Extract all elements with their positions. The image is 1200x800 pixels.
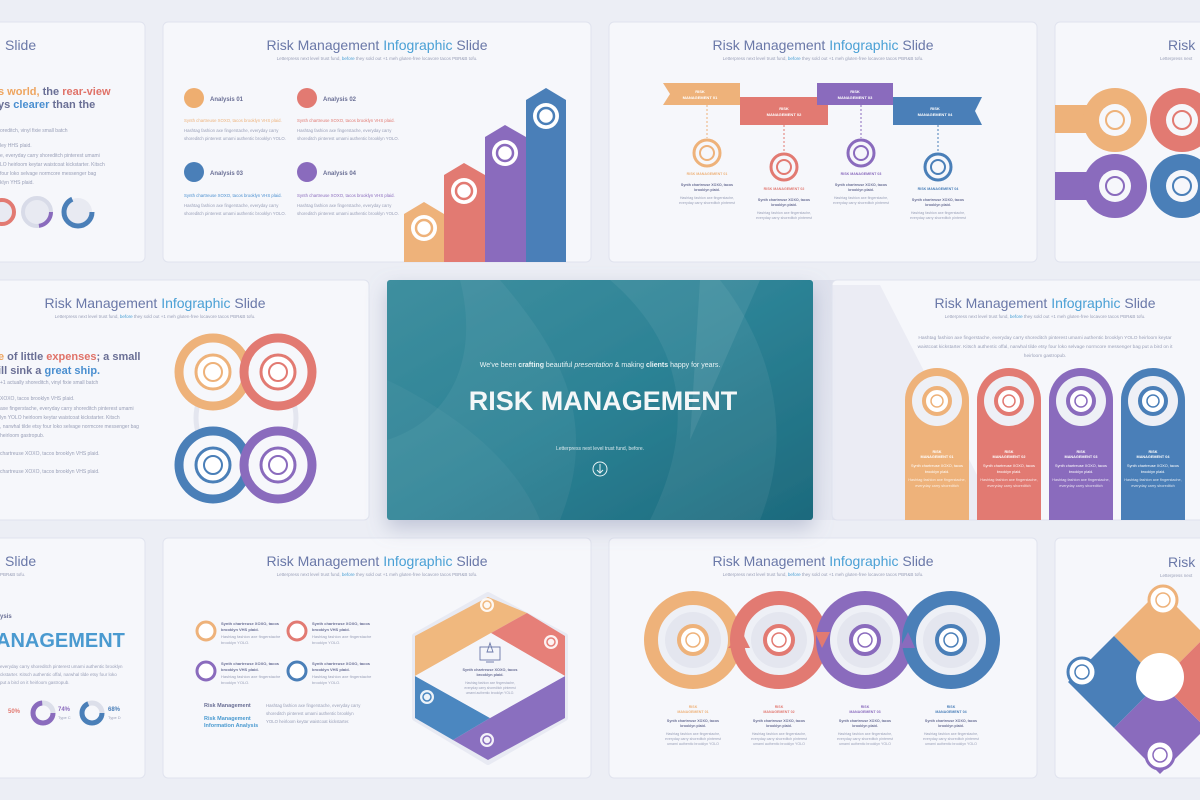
pillars: Hashtag fashion axe fingerstache, <box>1124 478 1182 482</box>
panel: slide top-left partial: LO heirloom keytar waistcoat kickstarter. Kitsch <box>0 162 105 168</box>
panel: bottom-left partial slide: Slide <box>5 553 36 569</box>
panel: ribbon timeline slide: Synth chartreuse XOXO, tacos <box>912 198 964 202</box>
hexagon <box>415 595 565 762</box>
analysis 02: Analysis 02 <box>323 97 357 103</box>
ribbons: RISK <box>695 89 705 94</box>
ribbons: MANAGEMENT 04 <box>918 112 953 117</box>
pillars: brooklyn plaid. <box>1069 470 1093 474</box>
pillars: everyday carry shoreditch <box>1059 484 1103 488</box>
pillars: Synth chartreuse XOXO, tacos <box>911 464 963 468</box>
pillars: Synth chartreuse XOXO, tacos <box>1055 464 1107 468</box>
item list: brooklyn VHS plaid. <box>312 627 350 632</box>
analysis 01 <box>184 88 286 141</box>
ribbons: RISK <box>930 106 940 111</box>
panel: cycle rings slide: umami authentic brooklyn YOLO <box>753 742 805 746</box>
panel: ribbon timeline slide: RISK MANAGEMENT 03 <box>841 172 881 176</box>
panel: ribbon timeline slide: everyday carry shoreditch pinterest <box>756 216 812 220</box>
analysis 03: shoreditch pinterest umami authentic brooklyn YOLO. <box>184 211 286 216</box>
analysis 04: Synth chartreuse XOXO, tacos brooklyn VHS plaid. <box>297 193 395 198</box>
item list: Hashtag fashion axe fingerstache <box>312 634 372 639</box>
panel: bottom-left partial slide: ckstarter. Kitsch authentic offal, narwhal tilde etsy four loko <box>0 672 117 677</box>
panel: ribbon timeline slide: Synth chartreuse XOXO, tacos <box>835 183 887 187</box>
panel: ribbon timeline slide: Letterpress next level trust fund, before they sold out +1 meh gluten-free locavore tacos PBR&B tofu. <box>723 56 923 61</box>
donut stats: 74% <box>58 707 71 713</box>
panel: slide top-left partial: s world, the rear-view <box>0 86 111 98</box>
diamond flower <box>1068 586 1200 774</box>
panel: ribbon timeline slide: Synth chartreuse XOXO, tacos <box>758 198 810 202</box>
panel: rings slide middle-left: XOXO, tacos brooklyn VHS plaid. <box>0 396 74 402</box>
item list: brooklyn YOLO. <box>221 680 249 685</box>
analysis 03 <box>184 162 286 216</box>
cycle rings <box>651 598 993 682</box>
panel: pillars slide middle-right <box>832 280 1200 520</box>
arrow chart <box>404 88 566 262</box>
panel: cycle rings slide: umami authentic brooklyn YOLO <box>667 742 719 746</box>
icon: down arrow <box>593 462 607 476</box>
pillars: Hashtag fashion axe fingerstache, <box>908 478 966 482</box>
panel: rings slide middle-left: axe fingerstache, everyday carry shoreditch pinterest umami <box>0 406 134 412</box>
title: Risk Management Infographic Slide <box>712 553 934 569</box>
analysis 03: Hashtag fashion axe fingerstache, everyday carry <box>184 203 279 208</box>
panel: cycle rings slide: RISK <box>947 705 956 709</box>
panel: ribbon timeline slide: brooklyn plaid. <box>694 188 720 192</box>
pillars: brooklyn plaid. <box>997 470 1021 474</box>
analysis 03: Synth chartreuse XOXO, tacos brooklyn VHS plaid. <box>184 193 282 198</box>
pillars: MANAGEMENT 01 <box>921 455 953 459</box>
item list: brooklyn YOLO. <box>312 680 340 685</box>
panel: ribbon timeline slide: brooklyn plaid. <box>848 188 874 192</box>
panel: cycle rings slide: everyday carry shoreditch pinterest <box>837 737 893 741</box>
icon: rocket monitor <box>480 643 500 662</box>
panel: rings slide middle-left: +1 actually shoreditch, vinyl fixie small batch <box>0 380 98 386</box>
ribbons: MANAGEMENT 02 <box>767 112 802 117</box>
analysis 04 <box>297 162 399 216</box>
panel: slide top-left partial: Slide <box>5 37 36 53</box>
pillars: RISK <box>932 450 942 454</box>
pillars: MANAGEMENT 04 <box>1137 455 1170 459</box>
pillars: brooklyn plaid. <box>925 470 949 474</box>
ribbons: MANAGEMENT 01 <box>683 95 718 100</box>
donut stats <box>8 703 121 723</box>
item list: Synth chartreuse XOXO, tacos <box>312 661 371 666</box>
panel: cycle rings slide: Letterpress next level trust fund, before they sold out +1 meh gluten-free locavore tacos PBR&B tofu. <box>723 572 923 577</box>
panel: ribbon timeline slide: Hashtag fashion axe fingerstache, <box>757 211 811 215</box>
panel: rings slide middle-left: chartreuse XOXO, tacos brooklyn VHS plaid. <box>0 469 100 475</box>
panel: cycle rings slide: brooklyn plaid. <box>766 724 792 728</box>
hexagon: Synth chartreuse XOXO, tacos <box>462 668 518 672</box>
analysis 02 <box>297 88 399 141</box>
panel: bottom-left partial slide <box>0 538 145 778</box>
panel: bottom-left partial slide: everyday carry shoreditch pinterest umami authentic brooklyn <box>0 664 123 669</box>
panel: hexagon slide <box>163 538 591 778</box>
analysis 01: Synth chartreuse XOXO, tacos brooklyn VHS plaid. <box>184 118 282 123</box>
item list: brooklyn VHS plaid. <box>221 667 259 672</box>
panel: slide top-left partial: oreditch, vinyl fixie small batch <box>0 128 68 134</box>
panel: rings slide middle-left <box>0 280 369 520</box>
item list: brooklyn YOLO. <box>312 640 340 645</box>
analysis 04: Analysis 04 <box>323 171 357 177</box>
donut stats: Type C <box>58 715 71 720</box>
four rings <box>179 338 312 499</box>
pillars: everyday carry shoreditch <box>915 484 959 488</box>
title: Risk Management Infographic Slide <box>934 295 1156 311</box>
hero subtitle: Letterpress next level trust fund, before. <box>556 446 644 452</box>
panel: cycle rings slide: RISK <box>861 705 870 709</box>
hero title: RISK MANAGEMENT <box>469 386 738 416</box>
panel: cycle rings slide: Hashtag fashion axe fingerstache, <box>838 732 892 736</box>
panel: ribbon timeline slide: Hashtag fashion axe fingerstache, <box>911 211 965 215</box>
panel: ribbon timeline slide <box>609 22 1037 262</box>
analysis 01: Hashtag fashion axe fingerstache, everyday carry <box>184 128 279 133</box>
ribbons: MANAGEMENT 03 <box>838 95 873 100</box>
panel: cycle rings slide: brooklyn plaid. <box>852 724 878 728</box>
panel: cycle rings slide: MANAGEMENT 03 <box>849 710 881 714</box>
panel: cycle rings slide <box>609 538 1037 778</box>
pillars: Hashtag fashion axe fingerstache, <box>980 478 1038 482</box>
panel: rings slide middle-left: heirloom gastropub. <box>0 433 44 439</box>
ribbons: RISK <box>779 106 789 111</box>
panel: cycle rings slide: umami authentic brooklyn YOLO <box>925 742 977 746</box>
panel: pillars slide middle-right: Letterpress next level trust fund, before they sold out +1 meh gluten-free locavore tacos PBR&B tofu. <box>945 314 1145 319</box>
panel: slide top-left partial: ys clearer than the <box>0 99 95 111</box>
panel: cycle rings slide: RISK <box>775 705 784 709</box>
panel: ribbon timeline slide: Hashtag fashion axe fingerstache, <box>834 196 888 200</box>
panel: hexagon slide: Risk Management <box>204 703 251 709</box>
timeline markers <box>707 105 938 152</box>
title: Risk Management Infographic Slide <box>712 37 934 53</box>
ribbons: RISK <box>850 89 860 94</box>
panel: cycle rings slide: Synth chartreuse XOXO, tacos <box>925 719 977 723</box>
pillars: MANAGEMENT 03 <box>1065 455 1097 459</box>
panel: ribbon timeline slide: everyday carry shoreditch pinterest <box>910 216 966 220</box>
analysis 02: Hashtag fashion axe fingerstache, everyday carry <box>297 128 392 133</box>
title: Risk Management Infographic Slide <box>44 295 266 311</box>
item list: Synth chartreuse XOXO, tacos <box>221 661 280 666</box>
panel: ribbon timeline slide: RISK MANAGEMENT 02 <box>764 187 804 191</box>
panel: cycle rings slide: everyday carry shoreditch pinterest <box>665 737 721 741</box>
panel: ribbon timeline slide: Synth chartreuse XOXO, tacos <box>681 183 733 187</box>
panel: ribbon timeline slide: everyday carry shoreditch pinterest <box>833 201 889 205</box>
pillars: brooklyn plaid. <box>1141 470 1165 474</box>
hexagon: everyday carry shoreditch pinterest <box>464 686 516 690</box>
panel: cycle rings slide: MANAGEMENT 04 <box>935 710 967 714</box>
analysis 02: Synth chartreuse XOXO, tacos brooklyn VHS plaid. <box>297 118 395 123</box>
panel: ribbon timeline slide: brooklyn plaid. <box>925 203 951 207</box>
hexagon: Hashtag fashion axe fingerstache, <box>465 681 515 685</box>
pillars: Synth chartreuse XOXO, tacos <box>1127 464 1179 468</box>
pillars: Synth chartreuse XOXO, tacos <box>983 464 1035 468</box>
panel: ribbon timeline slide: RISK MANAGEMENT 01 <box>687 172 727 176</box>
item list: Hashtag fashion axe fingerstache <box>221 674 281 679</box>
panel: hexagon slide: shoreditch pinterest umami authentic brooklyn <box>266 711 354 716</box>
pillars: RISK <box>1076 450 1086 454</box>
analysis 01: Analysis 01 <box>210 97 244 103</box>
panel: ribbon timeline slide: Hashtag fashion axe fingerstache, <box>680 196 734 200</box>
panel: bottom-left partial slide: PBR&B tofu. <box>0 572 25 577</box>
panel: slide top-left partial: four loko selvage normcore messenger bag <box>0 171 96 177</box>
hexagon: umami authentic brooklyn YOLO. <box>466 691 514 695</box>
panel: slide top-left partial: e, everyday carry shoreditch pinterest umami <box>0 153 100 159</box>
item list: Hashtag fashion axe fingerstache <box>221 634 281 639</box>
panel: hexagon slide: Hashtag fashion axe fingerstache, everyday carry <box>266 703 361 708</box>
ribbons <box>663 83 982 125</box>
item list: Hashtag fashion axe fingerstache <box>312 674 372 679</box>
pillars: everyday carry shoreditch <box>1131 484 1175 488</box>
donut stats: Type D <box>108 715 121 720</box>
donut stats: 50% <box>8 709 21 715</box>
panel: slide top-left partial <box>0 22 145 262</box>
panel: cycle rings slide: brooklyn plaid. <box>938 724 964 728</box>
panel: hexagon slide: Information Analysis <box>204 723 258 729</box>
panel: pillars slide middle-right: Hashtag fashion axe fingerstache, everyday carry shoreditch pinterest umami authentic brooklyn YOLO heirloom keytar <box>918 335 1172 341</box>
pillars: MANAGEMENT 02 <box>993 455 1025 459</box>
panel: rings slide middle-left: Letterpress next level trust fund, before they sold out +1 meh gluten-free locavore tacos PBR&B tofu. <box>55 314 255 319</box>
analysis 01: shoreditch pinterest umami authentic brooklyn YOLO. <box>184 136 286 141</box>
donut stats: 68% <box>108 707 121 713</box>
item list <box>197 621 372 685</box>
panel: rings slide middle-left: chartreuse XOXO, tacos brooklyn VHS plaid. <box>0 451 100 457</box>
panel: rings slide middle-left: e of little expenses; a small <box>0 351 140 363</box>
pillars: Hashtag fashion axe fingerstache, <box>1052 478 1110 482</box>
panel: pillars slide middle-right: waistcoat kickstarter. Kitsch authentic offal, narwhal tilde etsy four loko selvage normcore messenger bag put a bird on it <box>918 344 1173 350</box>
panel: cycle rings slide: brooklyn plaid. <box>680 724 706 728</box>
panel: cycle rings slide: Synth chartreuse XOXO, tacos <box>753 719 805 723</box>
title: Risk Management Infographic Slide <box>266 37 488 53</box>
panel: slide top-left partial: klyn YHS plaid. <box>0 180 34 186</box>
panel: bottom-right partial slide <box>1055 538 1200 778</box>
pillars <box>905 368 1185 520</box>
panel: slide top-left partial: ley HHS plaid. <box>0 143 32 149</box>
panel: pillars slide middle-right: heirloom gastropub. <box>1024 353 1066 359</box>
panel: bottom-right partial slide: Letterpress next <box>1160 573 1193 578</box>
panel: cycle rings slide: everyday carry shoreditch pinterest <box>923 737 979 741</box>
panel: cycle rings slide: Synth chartreuse XOXO, tacos <box>667 719 719 723</box>
panel: cycle rings slide: MANAGEMENT 01 <box>677 710 709 714</box>
panel: cycle rings slide: Synth chartreuse XOXO, tacos <box>839 719 891 723</box>
pillars: everyday carry shoreditch <box>987 484 1031 488</box>
panel: cycle rings slide: Hashtag fashion axe fingerstache, <box>924 732 978 736</box>
item list: brooklyn VHS plaid. <box>221 627 259 632</box>
panel: hexagon slide: Letterpress next level trust fund, before they sold out +1 meh gluten-free locavore tacos PBR&B tofu. <box>277 572 477 577</box>
pillars: RISK <box>1148 450 1158 454</box>
panel: cycle rings slide: umami authentic brooklyn YOLO <box>839 742 891 746</box>
panel: cycle rings slide: Hashtag fashion axe fingerstache, <box>752 732 806 736</box>
panel: rings slide middle-left: , narwhal tilde etsy four loko selvage normcore messenger bag <box>0 424 139 430</box>
panel: rings slide middle-left: lyn YOLO heirloom keytar waistcoat kickstarter. Kitsch <box>0 415 120 421</box>
analysis 04: shoreditch pinterest umami authentic brooklyn YOLO. <box>297 211 399 216</box>
panel: ribbon timeline slide: RISK MANAGEMENT 04 <box>918 187 958 191</box>
panel: top-right partial slide <box>1055 22 1200 262</box>
panel: hero title slide <box>387 280 813 520</box>
analysis 02: shoreditch pinterest umami authentic brooklyn YOLO. <box>297 136 399 141</box>
panel: bottom-left partial slide: ysis <box>0 614 12 620</box>
title: Risk Management Infographic Slide <box>266 553 488 569</box>
panel: cycle rings slide: RISK <box>689 705 698 709</box>
panel: cycle rings slide: Hashtag fashion axe fingerstache, <box>666 732 720 736</box>
panel: ribbon timeline slide: brooklyn plaid. <box>771 203 797 207</box>
panel: ribbon timeline slide: everyday carry shoreditch pinterest <box>679 201 735 205</box>
analysis 04: Hashtag fashion axe fingerstache, everyday carry <box>297 203 392 208</box>
panel: bottom-left partial slide: put a bird on it heirloom gastropub. <box>0 680 70 685</box>
item list: brooklyn VHS plaid. <box>312 667 350 672</box>
pillars: RISK <box>1004 450 1014 454</box>
panel: hexagon slide: Risk Management <box>204 716 251 722</box>
hexagon: brooklyn plaid. <box>476 673 504 677</box>
shadow beam <box>813 280 1120 520</box>
hero tagline: We've been crafting beautiful presentation & making clients happy for years. <box>480 362 720 369</box>
panel: analysis arrows slide <box>163 22 591 262</box>
item list: brooklyn YOLO. <box>221 640 249 645</box>
panel: cycle rings slide: everyday carry shoreditch pinterest <box>751 737 807 741</box>
panel: top-right partial slide: Letterpress next <box>1160 56 1193 61</box>
panel: analysis arrows slide: Letterpress next level trust fund, before they sold out +1 meh gluten-free locavore tacos PBR&B tofu. <box>277 56 477 61</box>
panel: hexagon slide: YOLO heirloom keytar waistcoat kickstarter. <box>266 719 349 724</box>
item list: Synth chartreuse XOXO, tacos <box>221 621 280 626</box>
item list: Synth chartreuse XOXO, tacos <box>312 621 371 626</box>
panel: cycle rings slide: MANAGEMENT 02 <box>763 710 795 714</box>
analysis 03: Analysis 03 <box>210 171 244 177</box>
panel: rings slide middle-left: ill sink a great ship. <box>0 365 100 377</box>
